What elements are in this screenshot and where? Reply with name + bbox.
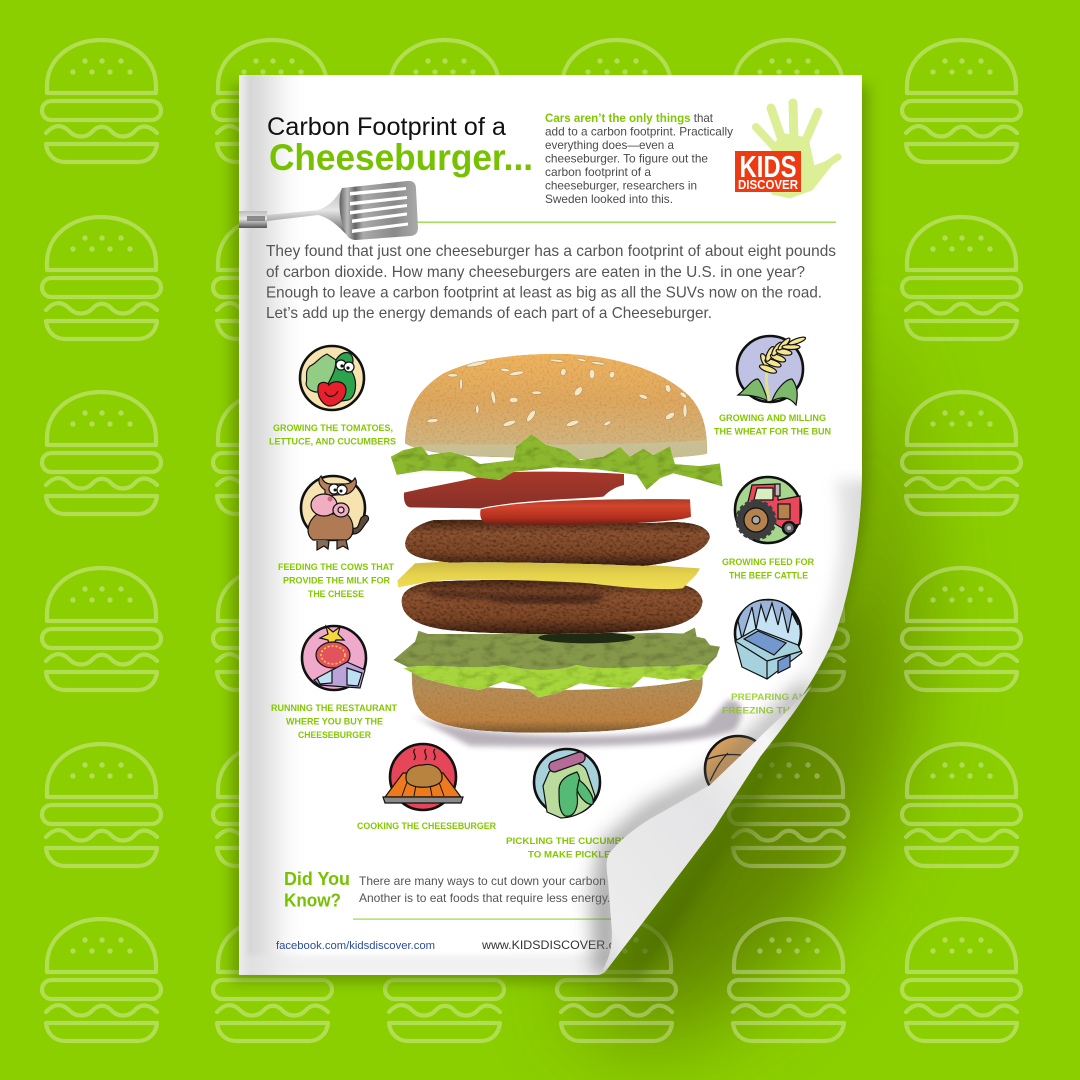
- icon: bun under the curl: [705, 736, 771, 802]
- did you know heading: [285, 872, 349, 906]
- icon: restaurant: [302, 626, 366, 690]
- label: feeding the cows: FEEDING THE COWS THAT: [278, 561, 394, 572]
- label: running the restaurant: WHERE YOU BUY THE: [286, 716, 383, 726]
- body text block: [266, 243, 836, 322]
- sesame seeds: [427, 357, 688, 428]
- icon: cow: [301, 476, 369, 550]
- icon: wheat: [737, 336, 806, 405]
- body text block: Enough to leave a carbon footprint at least as big as all the SUVs now on the road.: [266, 284, 822, 302]
- label: feed for cattle: GROWING FEED FOR: [722, 556, 814, 567]
- label: preparing and freezing: FREEZING THE BUN: [722, 704, 822, 716]
- label: feeding the cows: THE CHEESE: [308, 588, 364, 599]
- heading: [267, 113, 533, 178]
- label: feeding the cows: [278, 564, 394, 597]
- label: cooking: COOKING THE CHEESEBURGER: [357, 820, 496, 831]
- intro text block: Cars aren’t the only things that: [545, 112, 714, 125]
- cucumber sliver: [538, 632, 635, 643]
- page shading near the curved edge: [740, 480, 880, 760]
- tomato slices: [480, 499, 691, 525]
- did you know heading: Know?: [284, 890, 341, 910]
- intro text block: cheeseburger. To figure out the: [545, 152, 708, 166]
- label: tomatoes, lettuce, cucumbers: LETTUCE, AND CUCUMBERS: [269, 436, 396, 446]
- exploded cheeseburger illustration: [391, 354, 723, 733]
- burger ground shadow: [412, 700, 742, 747]
- label: wheat: THE WHEAT FOR THE BUN: [714, 426, 831, 436]
- label: running the restaurant: RUNNING THE RESTAURANT: [271, 702, 397, 713]
- logo: Kids Discover with hand: [735, 103, 838, 198]
- label: preparing and freezing: [722, 694, 802, 714]
- icon: lettuce, cucumber, tomato: [300, 346, 364, 410]
- icon: tractor: [735, 477, 801, 543]
- body text block: They found that just one cheeseburger has a carbon footprint of about eight pounds: [266, 243, 836, 260]
- bottom lettuce: [393, 627, 720, 697]
- paper sheet: [239, 75, 880, 975]
- lower patty grill marks: [430, 593, 603, 602]
- intro text block: cheeseburger, researchers in: [545, 180, 697, 192]
- label: pickling: PICKLING THE CUCUMBERS: [506, 835, 642, 846]
- top lettuce: [391, 434, 723, 490]
- did you know heading: Did You: [284, 869, 350, 889]
- icon: cooking on a grill: [383, 744, 463, 810]
- heading: Cheeseburger...: [269, 137, 533, 178]
- label: tomatoes, lettuce, cucumbers: GROWING THE TOMATOES,: [273, 422, 393, 433]
- icon: pickle jar: [534, 749, 600, 818]
- intro text block: add to a carbon footprint. Practically: [545, 126, 733, 138]
- body text block: of carbon dioxide. How many cheeseburgers are eaten in the U.S. in one year?: [266, 264, 805, 281]
- cheese slice: [397, 561, 700, 589]
- did you know text: [359, 876, 610, 904]
- body text block: Let’s add up the energy demands of each part of a Cheeseburger.: [266, 305, 712, 322]
- bottom bun: [412, 672, 703, 733]
- did you know text: Another is to eat foods that require less energy.: [359, 891, 610, 905]
- logo: Kids Discover with hand: DISCOVER: [738, 177, 799, 192]
- top bun: [405, 354, 707, 459]
- did you know text: There are many ways to cut down your carbon footprint.: [359, 874, 656, 888]
- intro text block: everything does—even a: [545, 139, 675, 152]
- upper patty: [405, 520, 710, 566]
- label: wheat: [714, 414, 830, 434]
- bottom rule: [353, 918, 623, 920]
- header rule: [415, 222, 836, 223]
- intro text block: Sweden looked into this.: [545, 193, 673, 206]
- logo: Kids Discover with hand: KIDS: [740, 149, 796, 184]
- intro text block: carbon footprint of a: [545, 166, 652, 179]
- label: running the restaurant: [272, 704, 397, 738]
- label: wheat: GROWING AND MILLING: [719, 412, 826, 423]
- icon: freezer: [735, 600, 802, 679]
- tight page drop shadow: [232, 85, 868, 982]
- heading: Carbon Footprint of a: [267, 113, 506, 141]
- footer: facebook link: facebook.com/kidsdiscover.com: [276, 940, 435, 952]
- shadow cast on the page by the curl: [592, 684, 815, 975]
- page curl flap: [596, 685, 812, 975]
- label: feed for cattle: [722, 558, 814, 578]
- label: running the restaurant: CHEESEBURGER: [298, 729, 371, 740]
- broad soft shadow under the curl: [570, 300, 907, 1040]
- label: tomatoes, lettuce, cucumbers: [270, 424, 396, 446]
- label: preparing and freezing: PREPARING AND: [731, 691, 813, 702]
- lower patty: [402, 580, 703, 634]
- icon: spatula: [239, 181, 418, 240]
- label: pickling: TO MAKE PICKLES: [528, 848, 617, 860]
- label: pickling: [506, 838, 624, 858]
- label: feeding the cows: PROVIDE THE MILK FOR: [283, 574, 390, 586]
- intro text block: [545, 112, 733, 206]
- label: feed for cattle: THE BEEF CATTLE: [729, 570, 808, 580]
- footer: website: www.KIDSDISCOVER.com: [481, 938, 632, 952]
